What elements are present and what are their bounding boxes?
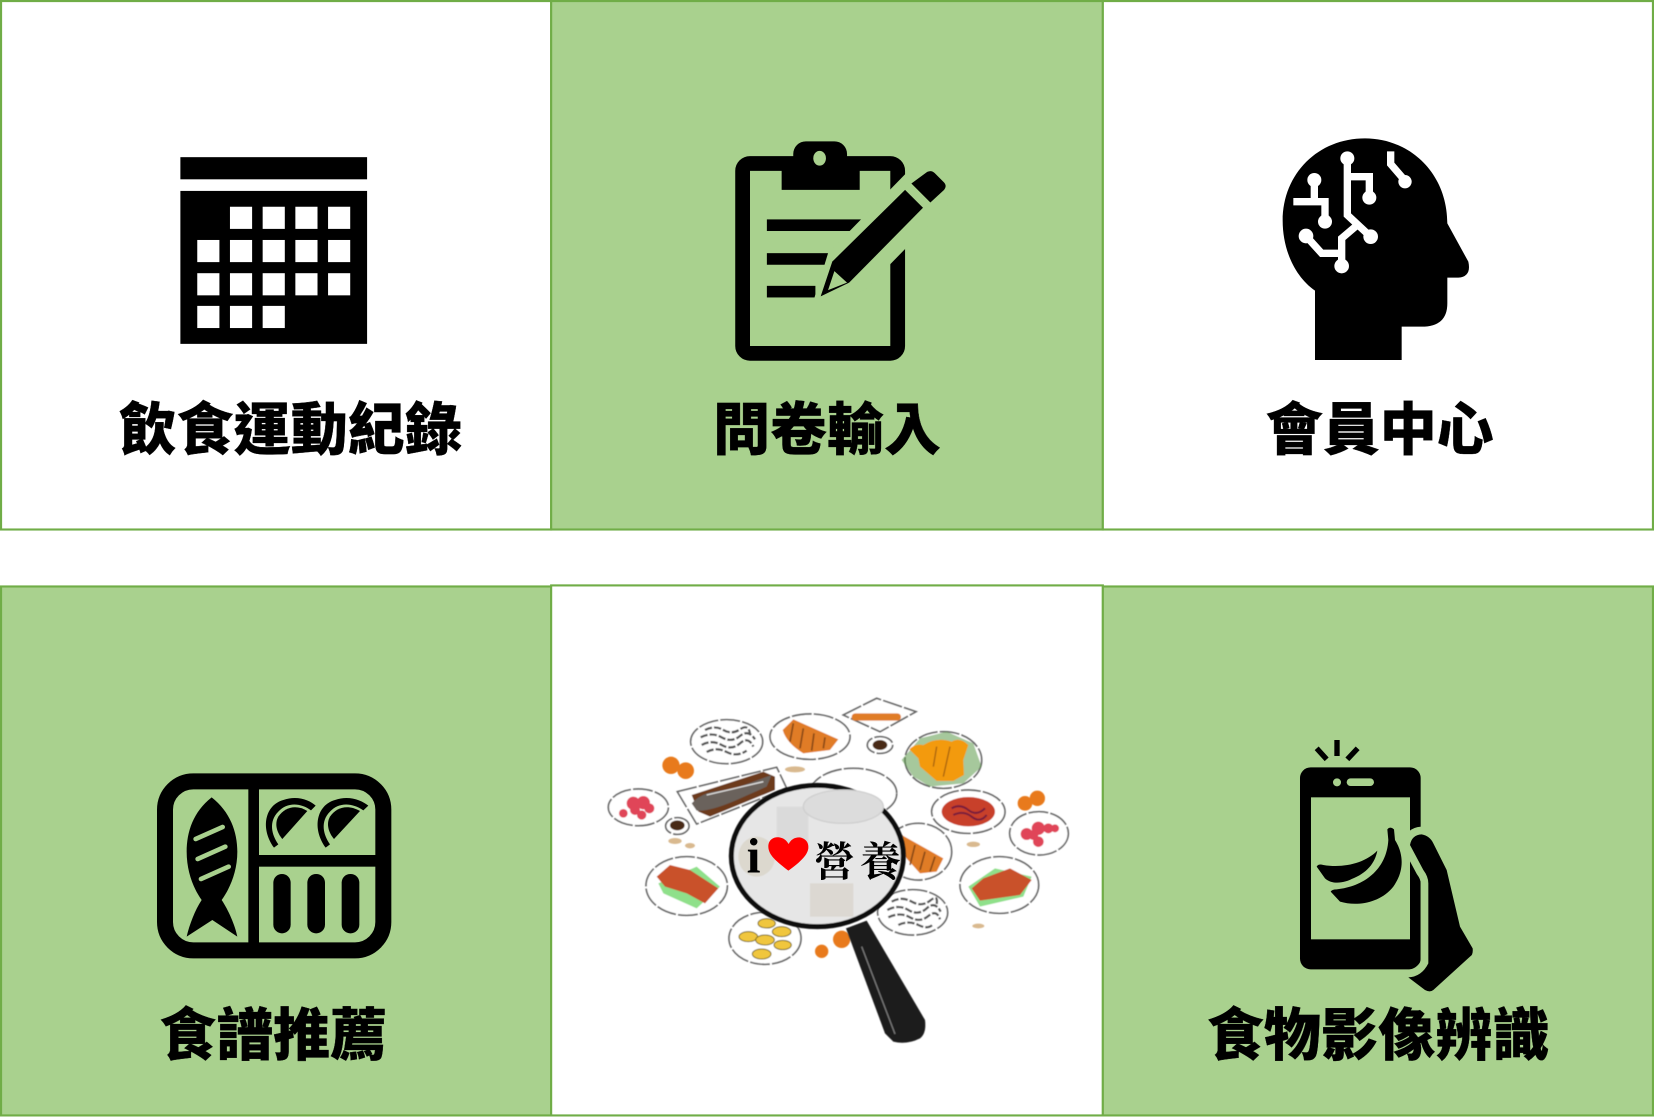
icon: hand holding phone with banana (1300, 740, 1473, 991)
meat slices stripes (790, 723, 935, 872)
icon: clipboard and pencil (743, 141, 955, 353)
logo: i營養 magnifier over food plates (608, 698, 1068, 1043)
beans (668, 766, 984, 928)
whole fish on tray (692, 772, 775, 817)
chicken (902, 732, 982, 787)
label: 飲食運動紀錄: 飲食運動紀錄 (119, 398, 462, 462)
panel: recipe recommendation (1, 586, 551, 1115)
label: 食譜推薦: 食譜推薦 (159, 1004, 387, 1068)
label: 會員中心: 會員中心 (1266, 398, 1494, 462)
label: 食物影像辨識: 食物影像辨識 (1207, 1004, 1550, 1068)
lens text: i♥營養: 養 (860, 829, 901, 888)
lens text: i♥營養: i (747, 828, 761, 884)
label: 問卷輸入: 問卷輸入 (713, 398, 941, 462)
icon: calendar (180, 157, 367, 344)
oranges (662, 757, 1045, 958)
yellow nuts (739, 919, 791, 959)
panel: questionnaire input (551, 1, 1103, 530)
magnifier handle (846, 921, 925, 1043)
magnifier lens (731, 785, 903, 927)
panel: diet and exercise log (1, 1, 551, 530)
icon: head with circuit brain (1283, 138, 1469, 360)
noodles (701, 727, 941, 927)
icon: bento box (165, 781, 383, 950)
red sauce plate (942, 797, 995, 826)
red dishes (619, 796, 1059, 847)
saucer centres (670, 740, 887, 830)
panel: centre logo background (551, 585, 1103, 1115)
panel: food image recognition (1103, 586, 1653, 1115)
lens text: i♥營養 (747, 828, 901, 888)
food plates illustration (608, 698, 1068, 964)
meats (783, 713, 943, 873)
panel: member center (1103, 1, 1653, 530)
icon: red heart (768, 837, 808, 871)
greens and orange dishes (657, 865, 1032, 908)
lens text: i♥營養: 營 (814, 829, 855, 888)
